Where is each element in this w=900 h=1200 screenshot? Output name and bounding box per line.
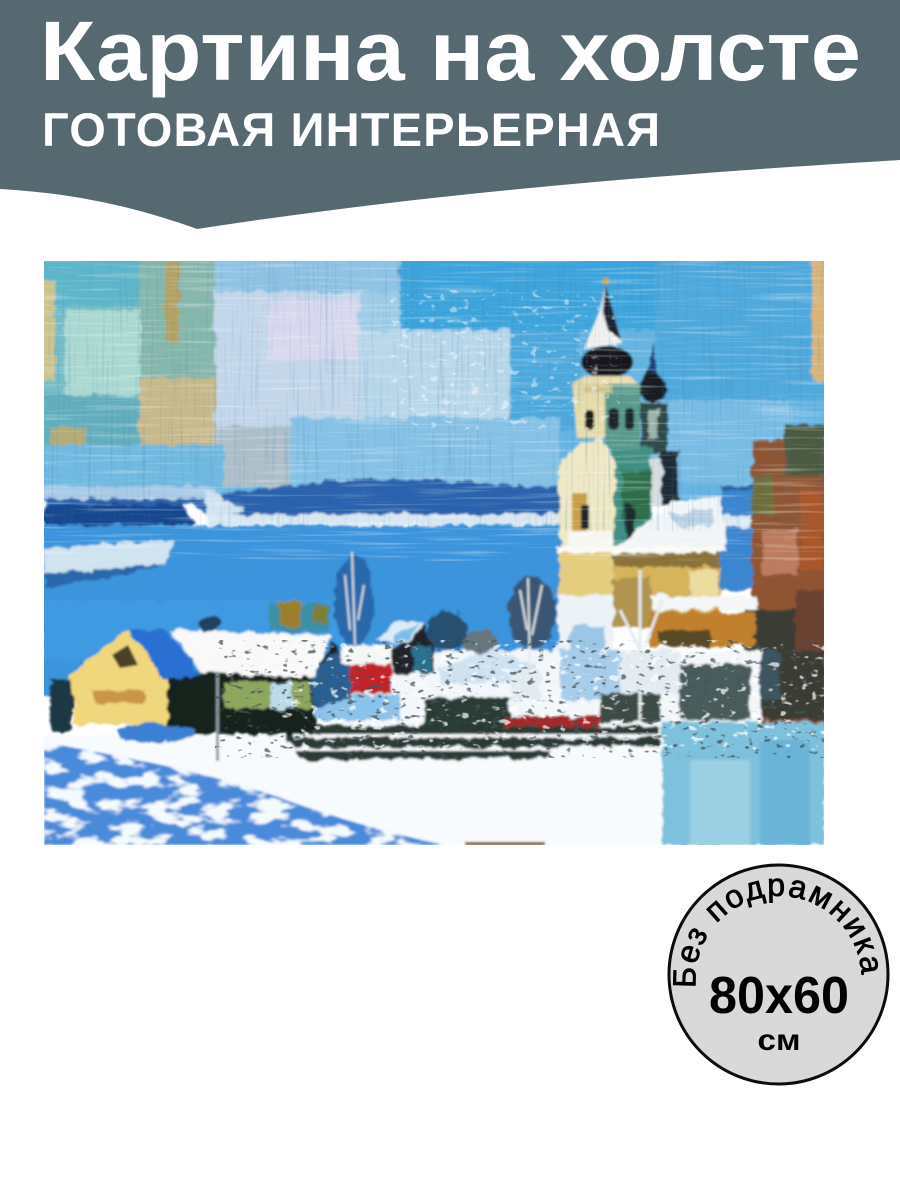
main bell tower: [558, 278, 640, 552]
light horizontal streaks: [44, 261, 824, 561]
unit: см: [758, 1024, 800, 1057]
right canvas patch: [662, 722, 824, 845]
spire ball: [602, 278, 610, 284]
spire shadow: [603, 284, 621, 340]
paint texture: [44, 261, 824, 758]
header banner: [0, 0, 900, 229]
dark vertical streaks: [44, 261, 824, 531]
church roof and walls: [557, 495, 758, 665]
onion dome: [581, 346, 633, 378]
lake: [40, 490, 760, 695]
badge: size and no stretcher frame: [668, 864, 890, 1086]
subtitle: ГОТОВАЯ ИНТЕРЬЕРНАЯ: [42, 103, 660, 156]
trees: [198, 552, 662, 720]
snow field: [44, 735, 664, 845]
spire: [584, 284, 622, 349]
blue snow mound: [117, 723, 193, 743]
snowy tree by church: [620, 570, 662, 720]
red house: [342, 645, 397, 694]
wall: [70, 630, 168, 724]
wall stains: [95, 690, 145, 704]
banner shape: [0, 0, 900, 229]
size: 80x60: [709, 967, 849, 1025]
white fence rails: [290, 735, 660, 750]
curved label: Без подрамника: [672, 878, 878, 986]
painted scene: [30, 250, 840, 845]
snowy foreground: [44, 716, 824, 845]
small far house: [376, 620, 434, 674]
badge circle: [669, 865, 888, 1084]
distant hills and far shore: [44, 476, 755, 529]
back church tower: [612, 343, 678, 545]
dark flecks: [215, 640, 824, 758]
attic detail: [112, 645, 138, 668]
sky: [30, 250, 840, 500]
gable house: [310, 640, 355, 711]
painting: winter village with church: [30, 250, 840, 845]
yellow house: [50, 627, 219, 761]
bushes: [198, 601, 330, 632]
village snow and garden: [300, 650, 760, 734]
fence band: [280, 726, 660, 760]
right birch: [508, 576, 556, 648]
red fence detail: [505, 716, 600, 728]
sky chips: [390, 290, 620, 430]
left birch: [334, 554, 374, 646]
right foliage: [742, 422, 824, 727]
title: Картина на холсте: [40, 4, 861, 98]
left bush: [50, 680, 73, 732]
upper tier: [572, 376, 640, 438]
utility pole: [216, 673, 219, 761]
brown edge: [465, 842, 545, 845]
snow flecks: [280, 640, 824, 750]
dark village tree: [427, 610, 467, 650]
long barn: [165, 630, 332, 734]
lower tier: [558, 436, 615, 552]
belfry windows: [585, 410, 594, 430]
blue roof: [127, 627, 200, 681]
mottled blue snow shadow: [44, 742, 445, 845]
